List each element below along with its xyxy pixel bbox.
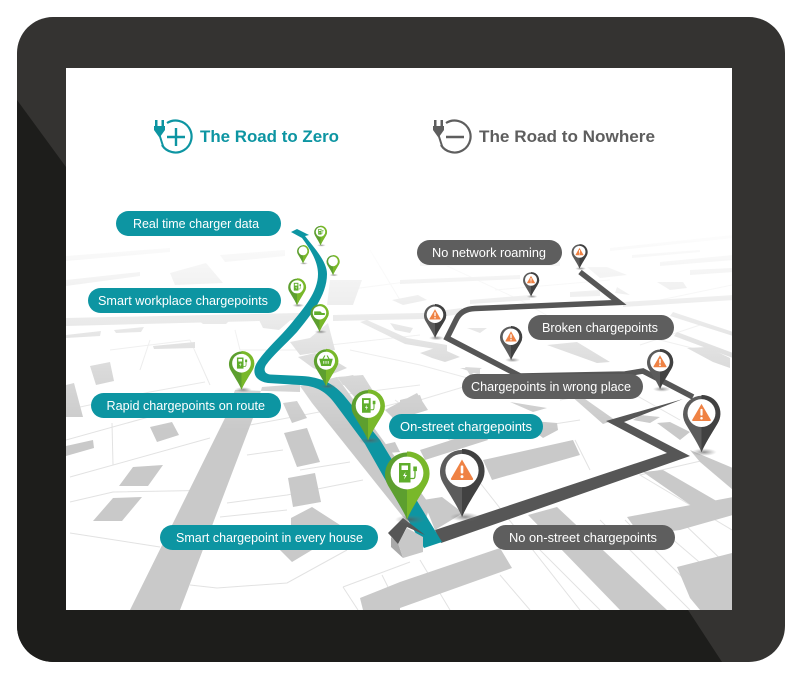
heading: The Road to Zero bbox=[154, 120, 339, 153]
pin: small green left bbox=[297, 245, 309, 265]
street map background bbox=[66, 225, 733, 610]
pin: car bbox=[310, 304, 329, 334]
label: No on-street chargepoints bbox=[493, 525, 675, 550]
heading: The Road to Zero: The Road to Zero bbox=[200, 127, 339, 146]
label: Smart workplace chargepoints bbox=[88, 288, 281, 313]
pin: workplace bbox=[288, 278, 306, 307]
icon: plug with plus bbox=[154, 120, 192, 153]
label: No network roaming bbox=[417, 240, 562, 265]
label: Real time charger data bbox=[116, 211, 281, 236]
label: No on-street chargepoints: No on-street chargepoints bbox=[509, 530, 657, 545]
pin: small green right bbox=[327, 255, 340, 276]
icon: plug with minus bbox=[433, 120, 471, 153]
label: Smart chargepoint in every house bbox=[160, 525, 378, 550]
label: Real time charger data: Real time charger data bbox=[133, 216, 260, 231]
pin: warning centre bbox=[500, 326, 522, 362]
label: Rapid chargepoints on route: Rapid chargepoints on route bbox=[106, 398, 265, 413]
heading: The Road to Nowhere: The Road to Nowhere bbox=[479, 127, 655, 146]
road along the teal route bbox=[300, 377, 430, 530]
pin: warning farthest bbox=[572, 244, 588, 270]
fade of the map towards the horizon bbox=[66, 235, 732, 400]
label: On-street chargepoints: On-street chargepoints bbox=[400, 419, 532, 434]
pin: far green bbox=[314, 226, 327, 247]
pin: warning large bbox=[440, 449, 485, 522]
pin: warning right bbox=[683, 395, 720, 456]
pin: on-street charger bbox=[352, 389, 385, 444]
main road bbox=[130, 384, 300, 610]
teal route to zero with arrow bbox=[254, 229, 442, 548]
house bbox=[388, 518, 425, 558]
pin: home charger bbox=[385, 451, 430, 524]
pin: warning far bbox=[523, 272, 539, 298]
label: No network roaming: No network roaming bbox=[432, 245, 546, 260]
label: Broken chargepoints: Broken chargepoints bbox=[542, 320, 658, 335]
label: Broken chargepoints bbox=[528, 315, 674, 340]
heading: The Road to Nowhere bbox=[433, 120, 655, 153]
label: On-street chargepoints bbox=[389, 414, 543, 439]
label: Chargepoints in wrong place: Chargepoints in wrong place bbox=[471, 379, 631, 394]
label: Chargepoints in wrong place bbox=[462, 374, 643, 399]
pin: warning wrong place bbox=[647, 349, 673, 392]
label: Rapid chargepoints on route bbox=[91, 393, 281, 418]
label: Smart chargepoint in every house: Smart chargepoint in every house bbox=[176, 530, 363, 545]
pin: warning left bbox=[424, 304, 446, 340]
label: Smart workplace chargepoints: Smart workplace chargepoints bbox=[98, 293, 268, 308]
grey route to nowhere bbox=[435, 272, 697, 543]
pin: shopping basket bbox=[314, 349, 338, 389]
pin: rapid charger bbox=[229, 351, 254, 392]
